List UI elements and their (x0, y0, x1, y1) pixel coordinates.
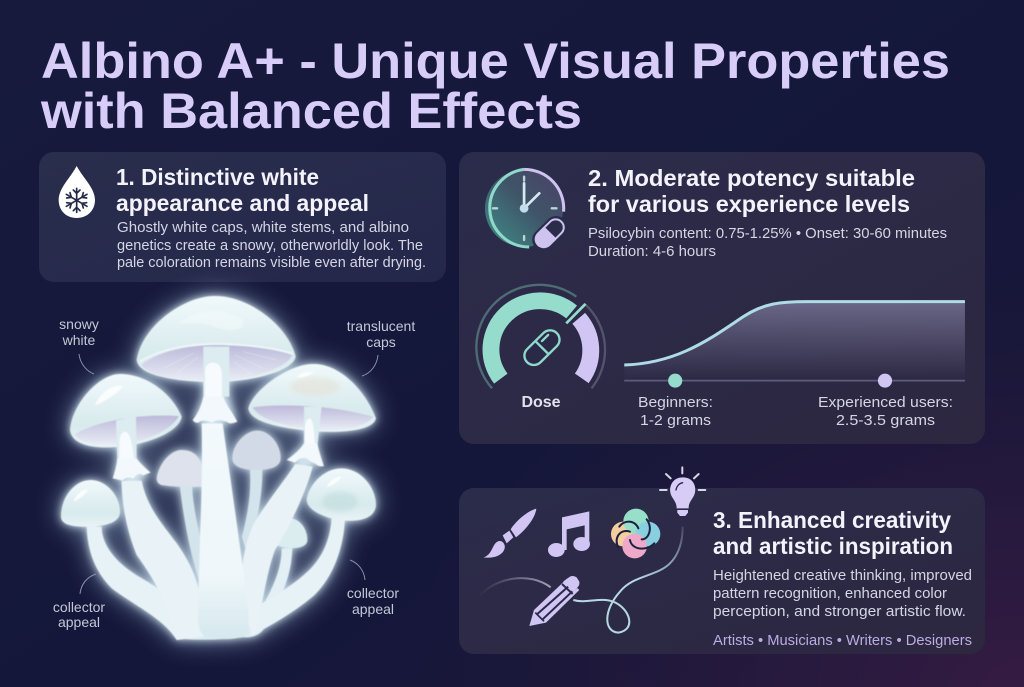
callout: collector appeal left: collector (53, 599, 105, 615)
right mushrooms (242, 364, 376, 637)
heading: section 2: for various experience levels (588, 191, 910, 217)
icon: colour swirl (611, 509, 660, 558)
label: experienced dose: 2.5-3.5 grams (836, 412, 935, 429)
text: section 1 body: pale coloration remains visible even after drying. (117, 254, 426, 271)
chart: dose response curve (624, 302, 965, 388)
callout: snowy white: snowy (59, 316, 99, 332)
heading: section 1: 1. Distinctive white (116, 164, 319, 190)
title: with Balanced Effects (40, 83, 582, 139)
text: section 3 body: Heightened creative thinking, improved (713, 567, 972, 584)
label: beginners dose: 1-2 grams (640, 412, 711, 429)
gauge: dose: Dose (521, 394, 561, 411)
text: section 2 stats: Duration: 4-6 hours (588, 243, 716, 260)
squiggle line (478, 578, 551, 597)
callout: collector appeal right: collector (347, 585, 399, 601)
icon: clock with pill (485, 169, 572, 255)
back small mushrooms (157, 431, 307, 605)
gauge: dose (476, 285, 605, 411)
text: audience list: Artists • Musicians • Writers • Designers (713, 633, 972, 649)
label: beginners dose: Beginners: (638, 394, 713, 411)
icon: paintbrush (483, 509, 536, 558)
panel: moderate potency (459, 152, 985, 444)
title: Albino A+ - Unique Visual Properties (41, 33, 950, 89)
central mushroom (137, 296, 296, 639)
illustration: glowing albino mushrooms (61, 296, 376, 640)
text: section 3 body: perception, and stronger artistic flow. (713, 603, 966, 620)
callout: translucent caps: caps (366, 334, 396, 350)
callout: snowy white (59, 316, 99, 374)
text: section 1 body (117, 219, 426, 271)
heading: section 2: 2. Moderate potency suitable (588, 165, 915, 191)
panel: creativity (459, 467, 985, 654)
label: experienced dose: Experienced users: (818, 394, 953, 411)
text: section 1 body: Ghostly white caps, white stems, and albino (117, 219, 409, 236)
callout: collector appeal right (347, 560, 399, 617)
text: section 2 stats: Psilocybin content: 0.75-1.25% • Onset: 30-60 minutes (588, 225, 947, 242)
heading: section 3: 3. Enhanced creativity (713, 507, 951, 533)
icon: pill (520, 326, 563, 369)
text: section 3 body: pattern recognition, enhanced color (713, 585, 947, 602)
cap highlights (73, 312, 342, 502)
label: experienced dose (818, 394, 953, 429)
callout: translucent caps: translucent (347, 318, 415, 334)
mushroom glow (61, 296, 376, 640)
callout: snowy white: white (62, 332, 96, 348)
panel: distinctive white appearance (39, 152, 446, 282)
base of stems (172, 606, 265, 640)
callout: collector appeal left: appeal (58, 614, 100, 630)
left mushrooms (61, 374, 204, 640)
mushroom bodies (61, 296, 376, 640)
callout: collector appeal left (53, 574, 105, 630)
title (40, 33, 950, 139)
heading: section 3 (713, 507, 953, 559)
text: section 1 body: genetics create a snowy, otherworldly look. The (117, 237, 423, 254)
text: section 2 stats (588, 225, 947, 260)
heading: section 1 (116, 164, 369, 216)
icon: pencil (529, 576, 579, 626)
creative icons (478, 467, 705, 633)
label: beginners dose (638, 394, 713, 429)
text: section 3 body (713, 567, 972, 620)
callout: collector appeal right: appeal (352, 601, 394, 617)
callout: translucent caps (347, 318, 415, 376)
heading: section 3: and artistic inspiration (713, 533, 953, 559)
icon: music note (548, 511, 590, 557)
icon: snowflake water drop (59, 166, 95, 218)
heading: section 1: appearance and appeal (116, 190, 369, 216)
heading: section 2 (588, 165, 915, 217)
icon: light bulb (660, 467, 705, 516)
